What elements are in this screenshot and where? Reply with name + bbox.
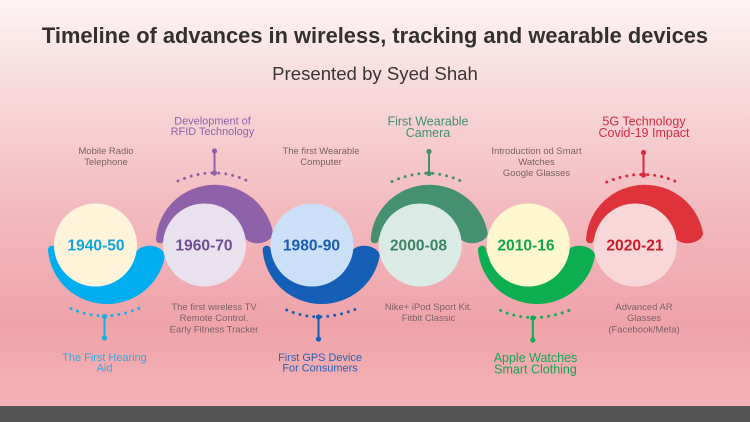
connector: 2000-08 <box>392 149 462 182</box>
description: 1960-70: Remote Control. <box>180 313 248 324</box>
description: 2010-16: Introduction od Smart <box>491 146 582 157</box>
heading: 1960-70: Development of <box>174 116 251 128</box>
subtitle: Presented by Syed Shah <box>272 63 478 84</box>
heading: 2000-08: Camera <box>406 126 450 140</box>
description: 2010-16: Watches <box>518 157 555 168</box>
milestone: 2020-21 <box>586 114 703 335</box>
connector: 1980-90 <box>287 309 356 342</box>
description: 2020-21: Glasses <box>627 313 661 324</box>
milestone: 2010-16 <box>478 146 595 376</box>
circle: 2020-21 <box>594 204 677 286</box>
heading: 2020-21: Covid-19 Impact <box>598 126 690 140</box>
year: 2010-16: 2010-16 <box>497 238 555 254</box>
connector: 1940-50 <box>71 307 142 341</box>
circle: 1940-50 <box>54 204 137 286</box>
circle: 1960-70 <box>163 204 246 286</box>
circle: 2000-08 <box>379 204 462 286</box>
heading: 2000-08: First Wearable <box>387 114 469 128</box>
milestone: 1980-90 <box>263 146 380 374</box>
heading: 1980-90: First GPS Device <box>278 352 362 364</box>
arc: 2000-08 <box>371 185 488 243</box>
year: 2020-21: 2020-21 <box>606 238 664 254</box>
heading: 2010-16: Apple Watches <box>494 351 577 365</box>
circle: 1980-90 <box>270 204 354 286</box>
connector: 2020-21 <box>607 150 676 182</box>
year: 1940-50: 1940-50 <box>67 238 125 254</box>
milestone: 2000-08 <box>371 114 488 324</box>
description: 2000-08: Nike+ iPod Sport Kit. <box>385 302 472 313</box>
description: 1980-90: Computer <box>300 157 342 168</box>
description: 1960-70: The first wireless TV <box>171 302 257 313</box>
heading: 1980-90: For Consumers <box>282 362 358 374</box>
description: 1940-50: Mobile Radio <box>78 146 134 157</box>
heading: 2010-16: Smart Clothing <box>494 362 577 376</box>
year: 2000-08: 2000-08 <box>390 238 447 254</box>
description: 2010-16: Google Glasses <box>503 168 570 179</box>
heading: 1940-50: The First Hearing <box>62 352 147 364</box>
arc: 1960-70 <box>156 185 273 243</box>
year: 1960-70: 1960-70 <box>175 238 233 254</box>
arc: 2010-16 <box>478 246 595 304</box>
heading: 2020-21: 5G Technology <box>602 114 686 128</box>
circle: 2010-16 <box>487 204 570 286</box>
description: 1960-70: Early Fitness Tracker <box>170 324 258 335</box>
heading: 1960-70: RFID Technology <box>171 126 255 138</box>
description: 2000-08: Fitbit Classic <box>402 313 456 324</box>
milestone: 1960-70 <box>156 116 273 335</box>
year: 1980-90: 1980-90 <box>283 238 340 254</box>
description: 1940-50: Telephone <box>84 157 128 168</box>
milestone: 1940-50 <box>48 146 165 374</box>
connector: 1960-70 <box>178 148 247 181</box>
arc: 1940-50 <box>48 246 165 304</box>
description: 2020-21: Advanced AR <box>615 302 673 313</box>
arc: 1980-90 <box>263 246 380 304</box>
description: 2020-21: (Facebook/Meta) <box>608 324 680 335</box>
heading: 1940-50: Aid <box>97 362 112 374</box>
description: 1980-90: The first Wearable <box>283 146 359 157</box>
arc: 2020-21 <box>586 185 703 243</box>
footer bar <box>0 406 750 422</box>
title: Timeline of advances in wireless, tracking and wearable devices <box>42 23 708 48</box>
connector: 2010-16 <box>501 310 570 343</box>
